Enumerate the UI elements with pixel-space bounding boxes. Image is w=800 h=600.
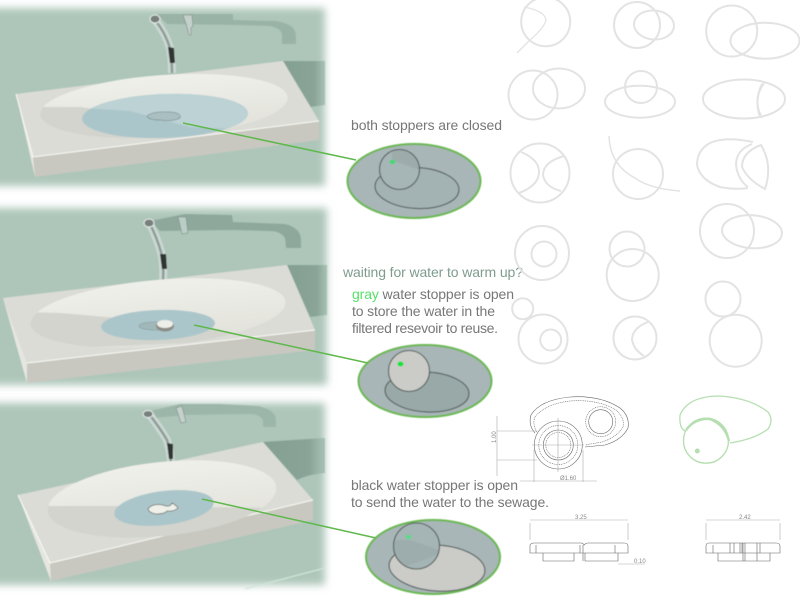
stopper circle: [388, 350, 430, 392]
faucet base: [143, 410, 153, 418]
spout shade: [150, 224, 163, 280]
thick upper arc: [686, 419, 729, 441]
reservoir outline: [374, 165, 460, 211]
basin shadow: [48, 506, 260, 538]
heading: waiting for water to warm up: waiting for water to warm up?: [342, 264, 523, 280]
stopper shade band: [390, 540, 445, 570]
stopper outline: [394, 523, 440, 569]
technical drawing: front view: [530, 515, 646, 565]
dimension lines: [530, 520, 645, 564]
callout ellipse: [358, 345, 492, 417]
panel: gray stopper open sink render: [0, 208, 327, 385]
caption: gray water stopper: to store the water in the: [352, 303, 495, 319]
plate outline: [530, 543, 628, 553]
green concept outline: [680, 396, 771, 463]
sketch 7: [510, 144, 570, 202]
green dot: [398, 362, 404, 366]
sketch 8: [609, 136, 680, 199]
sketch 2: [614, 2, 675, 48]
sketch 15: [706, 282, 762, 367]
faucet spout: [150, 224, 163, 280]
spout shade: [155, 20, 172, 73]
sink top: [3, 265, 315, 363]
reservoir outline: [384, 370, 470, 414]
dimension lines: [706, 520, 780, 540]
basin shadow: [30, 312, 230, 346]
stopper circle: [394, 523, 440, 569]
cold handle: [176, 406, 186, 423]
sketch 10: [700, 204, 783, 258]
water: [101, 308, 215, 342]
panel: black stopper open sink render: [0, 403, 325, 589]
cold handle: [178, 217, 188, 234]
water: [81, 91, 249, 141]
faucet spout: [149, 414, 171, 468]
outer body: [680, 396, 771, 443]
technical drawing: top view: [492, 397, 628, 482]
cold handle: [183, 15, 193, 35]
sketch 12: [607, 232, 659, 301]
dimension 2.42: 2.42: [739, 515, 751, 521]
sink front face: [50, 500, 313, 581]
faucet base: [150, 15, 160, 23]
spout shade: [149, 414, 171, 468]
sink left face: [16, 94, 35, 177]
caption: black water stopper: black water stopper is open: [351, 477, 518, 493]
sketch 9: [697, 139, 768, 189]
stopper cap: [156, 320, 174, 332]
stopper outline: [380, 150, 420, 190]
spout dark reflection: [160, 254, 167, 269]
stopper: [139, 320, 174, 332]
caption: gray water stopper: filtered resevoir to reuse.: [352, 320, 498, 336]
connector line 1: [183, 123, 356, 160]
caption: black water stopper: [351, 477, 549, 510]
concentric circles: [534, 421, 582, 469]
spout dark reflection: [167, 443, 173, 459]
stopper circle: [380, 150, 420, 190]
sketch 5: [605, 71, 675, 118]
connector line 2: [194, 325, 368, 363]
basin: [28, 269, 288, 357]
sink left face: [18, 495, 51, 581]
dimension 1.00: 1.00: [492, 431, 498, 443]
lower blocks and details: [713, 543, 770, 561]
green dot: [390, 160, 396, 164]
callout ellipse: [348, 144, 480, 218]
callout: both stoppers closed: [348, 144, 480, 218]
caption: gray water stopper: [352, 286, 514, 336]
stopper: [148, 503, 178, 514]
sketch 6: [703, 80, 785, 118]
caption: gray water stopper: gray water stopper is open: [352, 286, 514, 302]
sink top: [16, 61, 319, 157]
floor highlight: [245, 568, 325, 589]
sketch 11: [515, 226, 569, 280]
sketch 1: [517, 0, 570, 53]
panel background: [0, 403, 325, 585]
sink top: [18, 442, 313, 563]
sink edge highlight: [27, 330, 315, 363]
sink left face: [3, 298, 27, 383]
panel: both stoppers closed sink render: [0, 8, 325, 186]
stopper top: [157, 320, 173, 328]
sink edge highlight: [16, 94, 319, 157]
caption: black water stopper: to send the water to the sewage.: [351, 494, 549, 510]
concept sketches grid: [508, 0, 800, 367]
faucet shadow: [150, 214, 301, 248]
basin: [44, 450, 280, 548]
sketch 13: [512, 298, 568, 364]
stopper shade band: [392, 150, 418, 168]
spout dark reflection: [168, 47, 175, 63]
sketch 3: [706, 6, 800, 59]
stopper body outline: [530, 397, 628, 447]
wall shadow: [287, 265, 327, 317]
water: [112, 485, 216, 531]
panel background: [0, 208, 327, 385]
side circles: [586, 407, 616, 437]
dimension 0.10: 0.10: [634, 559, 646, 565]
drain: [147, 112, 180, 121]
sink edge highlight: [18, 495, 313, 563]
sketch 14: [614, 316, 656, 360]
wall shadow: [283, 61, 325, 107]
dimension 1.60: Ø1.60: [560, 476, 577, 482]
stopper recess: [139, 322, 171, 330]
basin: [38, 66, 290, 146]
basin shadow: [40, 107, 131, 138]
faucet shadow: [150, 404, 276, 427]
sink front face: [27, 330, 315, 383]
faucet shadow: [157, 14, 296, 44]
green dot: [406, 535, 412, 539]
reservoir fill: [388, 542, 486, 594]
callout ellipse: [366, 520, 500, 594]
plate outline: [706, 543, 780, 553]
connector line 3: [202, 499, 376, 538]
panel background: [0, 8, 325, 186]
callout: gray stopper open: [358, 345, 492, 417]
stopper circle: [684, 418, 728, 463]
sink front face: [33, 121, 319, 177]
water upper tint: [94, 94, 248, 128]
lower blocks: [536, 545, 618, 561]
technical drawing: side view: [706, 515, 780, 561]
wall shadow: [263, 438, 325, 480]
caption: both stoppers are closed: both stoppers are closed: [351, 117, 502, 133]
faucet base: [144, 219, 154, 227]
centre lines and dimensions: [497, 416, 597, 482]
callout: black stopper open: [366, 520, 500, 594]
dot: [695, 448, 700, 454]
sketch 4: [508, 68, 585, 120]
dimension 3.25: 3.25: [575, 515, 587, 521]
faucet spout: [155, 20, 172, 73]
